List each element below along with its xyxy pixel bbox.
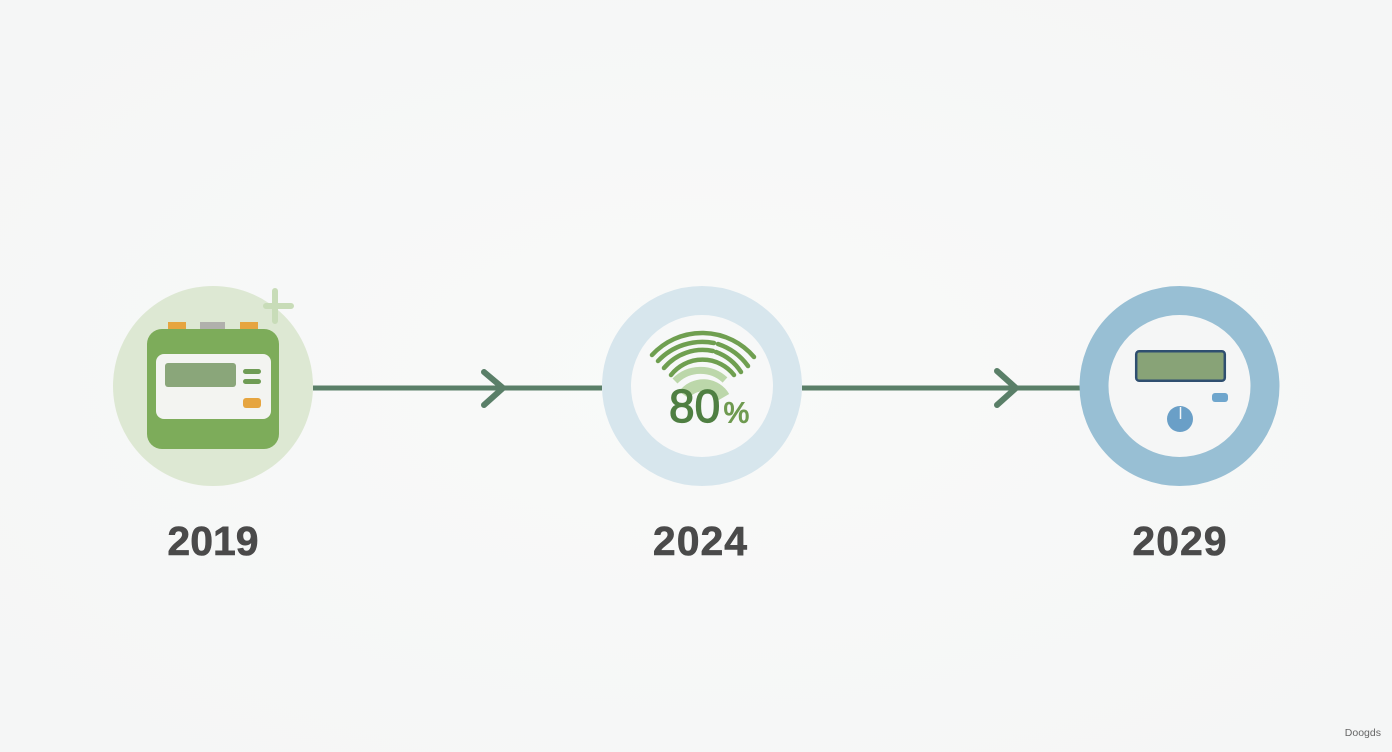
- year label 2029: 2029: [1132, 518, 1228, 564]
- icon: plus sign: [266, 291, 291, 321]
- icon: meter orange button: [243, 398, 261, 408]
- stat: 80 percent: [669, 380, 749, 432]
- milestone 2024: wireless 80 percent: [616, 300, 788, 472]
- stat: 80 percent: %: [724, 398, 749, 430]
- year label 2024: 2024: [653, 518, 748, 564]
- icon: meter display: [165, 363, 236, 387]
- milestone 2029: smart meter icon: [1094, 300, 1265, 472]
- icon: meter body: [147, 329, 279, 449]
- arrow: 2019 to 2024: [313, 372, 602, 405]
- icon: dial: [1167, 406, 1193, 432]
- year label 2019: 2019: [167, 518, 259, 564]
- arrow: 2024 to 2029: [802, 371, 1080, 405]
- icon: meter indicator lines: [243, 369, 261, 384]
- icon: small blue button: [1212, 393, 1228, 402]
- icon: display screen: [1136, 351, 1225, 381]
- watermark: Doogds: [1345, 727, 1381, 739]
- icon: meter panel: [156, 354, 271, 419]
- stat: 80 percent: 80: [669, 380, 720, 432]
- icon: wireless signal arcs: [652, 333, 754, 397]
- milestone 2019: meter icon: [113, 286, 313, 486]
- icon: meter top tabs: [168, 322, 258, 330]
